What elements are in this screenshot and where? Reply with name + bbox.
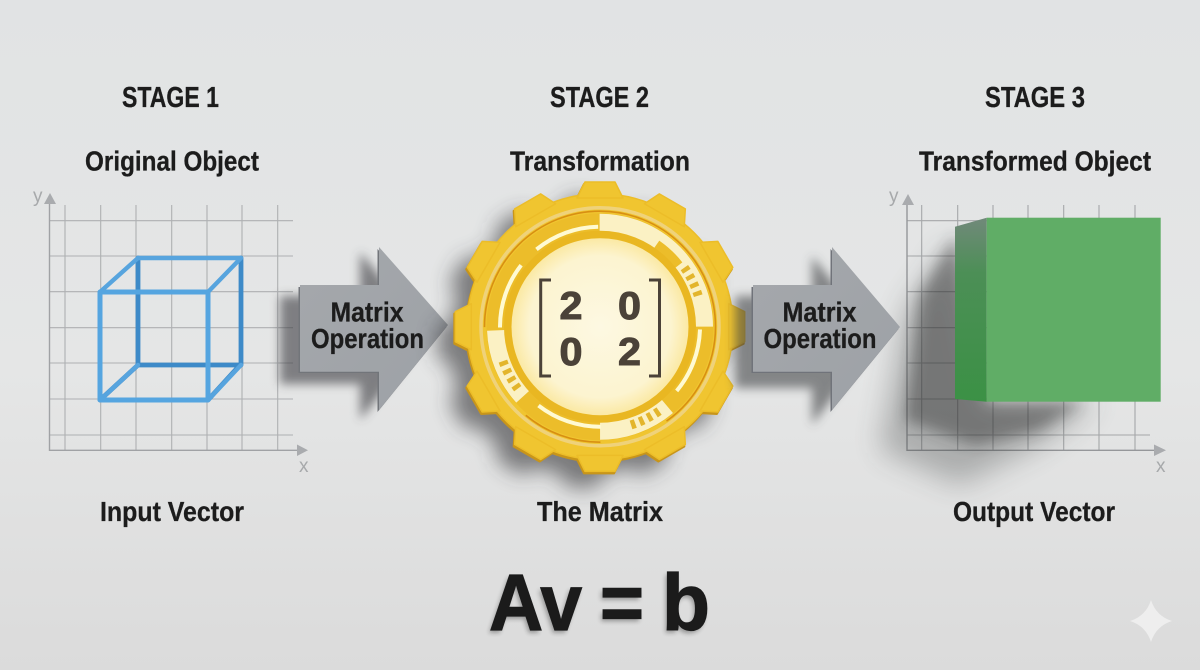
panel: stage 2 heading bbox=[510, 82, 690, 176]
label: matrix: Matrix bbox=[782, 296, 857, 328]
subheading: original object: Original Object bbox=[85, 146, 259, 176]
caption: the matrix: The Matrix bbox=[537, 496, 663, 527]
panel: stage 1 heading bbox=[85, 82, 259, 176]
matrix values: 2 bbox=[618, 331, 641, 374]
heading: stage 2: STAGE 2 bbox=[550, 82, 649, 114]
label: matrix: Matrix bbox=[330, 296, 404, 328]
matrix values: 0 bbox=[560, 331, 582, 374]
matrix values: 0 bbox=[618, 285, 641, 328]
icon: blue wireframe cube bbox=[100, 258, 241, 400]
chart: input coordinate grid: y bbox=[33, 186, 43, 207]
heading: stage 1: STAGE 1 bbox=[122, 82, 219, 114]
equation: Av = b: Av bbox=[487, 561, 580, 650]
label: operation: Operation bbox=[764, 323, 876, 354]
label: operation: Operation bbox=[311, 323, 424, 354]
arrow shadow: second arrow bbox=[735, 256, 878, 425]
equation: Av = b: = bbox=[600, 558, 644, 647]
caption: input vector: Input Vector bbox=[100, 496, 244, 527]
gear ring details bbox=[453, 180, 747, 474]
matrix brackets bbox=[541, 280, 660, 376]
equation: Av = b: Av bbox=[489, 558, 582, 647]
panel: stage captions bbox=[100, 496, 1115, 527]
subheading: transformed object: Transformed Object bbox=[919, 146, 1151, 176]
gear shadow bbox=[437, 198, 727, 487]
chart: input coordinate grid bbox=[33, 186, 309, 477]
arrow shadow: first arrow bbox=[280, 252, 428, 420]
arrow: first matrix operation bbox=[298, 247, 448, 412]
cube side face bbox=[955, 218, 987, 402]
arrow: second matrix operation bbox=[752, 247, 900, 412]
equation: Av = b: = bbox=[598, 561, 642, 650]
caption: output vector: Output Vector bbox=[953, 496, 1115, 527]
chart: output coordinate grid: y bbox=[889, 186, 899, 207]
panel: stage 3 heading bbox=[919, 82, 1151, 176]
icon: matrix gear bbox=[453, 180, 747, 474]
cube shadow bbox=[880, 235, 1100, 485]
equation: Av = b bbox=[487, 558, 710, 650]
equation: Av = b: b bbox=[662, 558, 710, 647]
matrix values bbox=[560, 285, 641, 374]
chart: output coordinate grid: x bbox=[1156, 456, 1166, 477]
chart: input coordinate grid: x bbox=[299, 456, 309, 477]
icon: sparkle watermark bbox=[1130, 600, 1172, 642]
cube front face bbox=[987, 218, 1161, 402]
chart: output coordinate grid bbox=[889, 186, 1166, 477]
gear center bbox=[512, 238, 688, 415]
matrix values: 2 bbox=[560, 285, 582, 328]
equation: Av = b: b bbox=[660, 561, 708, 650]
heading: stage 3: STAGE 3 bbox=[985, 82, 1085, 114]
icon: solid green cube bbox=[955, 218, 1161, 402]
subheading: transformation: Transformation bbox=[510, 146, 690, 176]
